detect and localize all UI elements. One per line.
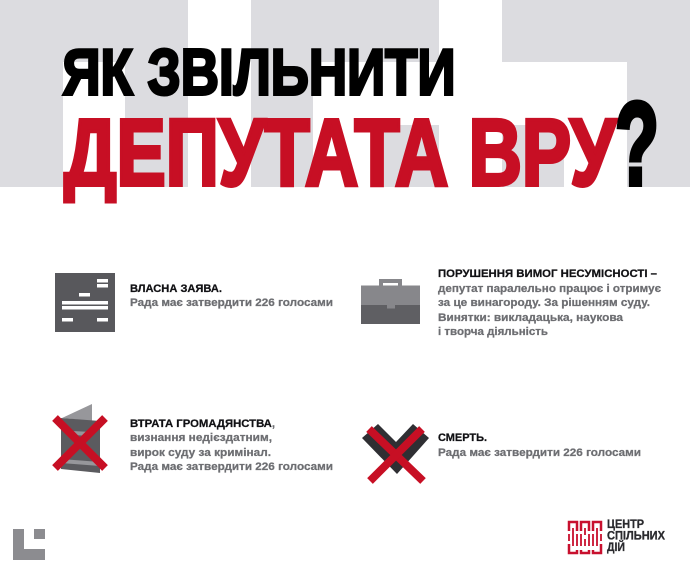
text: own statement: ВЛАСНА ЗАЯВА. [130, 283, 222, 295]
text: loss of citizenship: ВТРАТА ГРОМАДЯНСТВА , [130, 418, 275, 430]
text: incompatibility violation: і творча діяльність [438, 326, 548, 338]
text: loss of citizenship: Рада має затвердити 226 голосами [130, 461, 333, 473]
title [61, 48, 656, 204]
text: own statement: Рада має затвердити 226 голосами [130, 297, 333, 309]
logo: civil action centre: ДІЙ [607, 539, 625, 554]
logo mark [569, 522, 601, 553]
logo text: ЦЕНТР [607, 517, 644, 531]
text: incompatibility violation: депутат паралельно працює і отримує [438, 283, 661, 295]
text: loss of citizenship: визнання недієздатним, [130, 432, 272, 444]
text: incompatibility violation: Винятки: викладацька, наукова [438, 312, 624, 324]
title line 1: ЯК ЗВІЛЬНИТИ [62, 36, 456, 108]
logo: small grey mark [13, 529, 45, 560]
question mark: ? [615, 78, 659, 210]
text: incompatibility violation [438, 268, 661, 338]
text: loss of citizenship: вирок суду за кримінал. [130, 447, 271, 459]
icon: crossed-out passport [55, 404, 105, 473]
text: incompatibility violation: за це винагороду. За рішенням суду. [438, 297, 650, 309]
icon: crossed-out heart [362, 424, 429, 481]
logo: civil action centre: СПІЛЬНИХ [607, 528, 665, 542]
text: death: СМЕРТЬ. [438, 432, 487, 444]
logo: civil action centre [569, 517, 665, 554]
icon: application document [55, 273, 115, 332]
text: incompatibility violation: ПОРУШЕННЯ ВИМОГ НЕСУМІСНОСТІ – [438, 268, 657, 280]
text: loss of citizenship [130, 418, 333, 473]
text: own statement [130, 283, 333, 309]
text: death [438, 432, 641, 459]
icon: briefcase [361, 279, 420, 324]
text: death: Рада має затвердити 226 голосами [438, 447, 641, 459]
